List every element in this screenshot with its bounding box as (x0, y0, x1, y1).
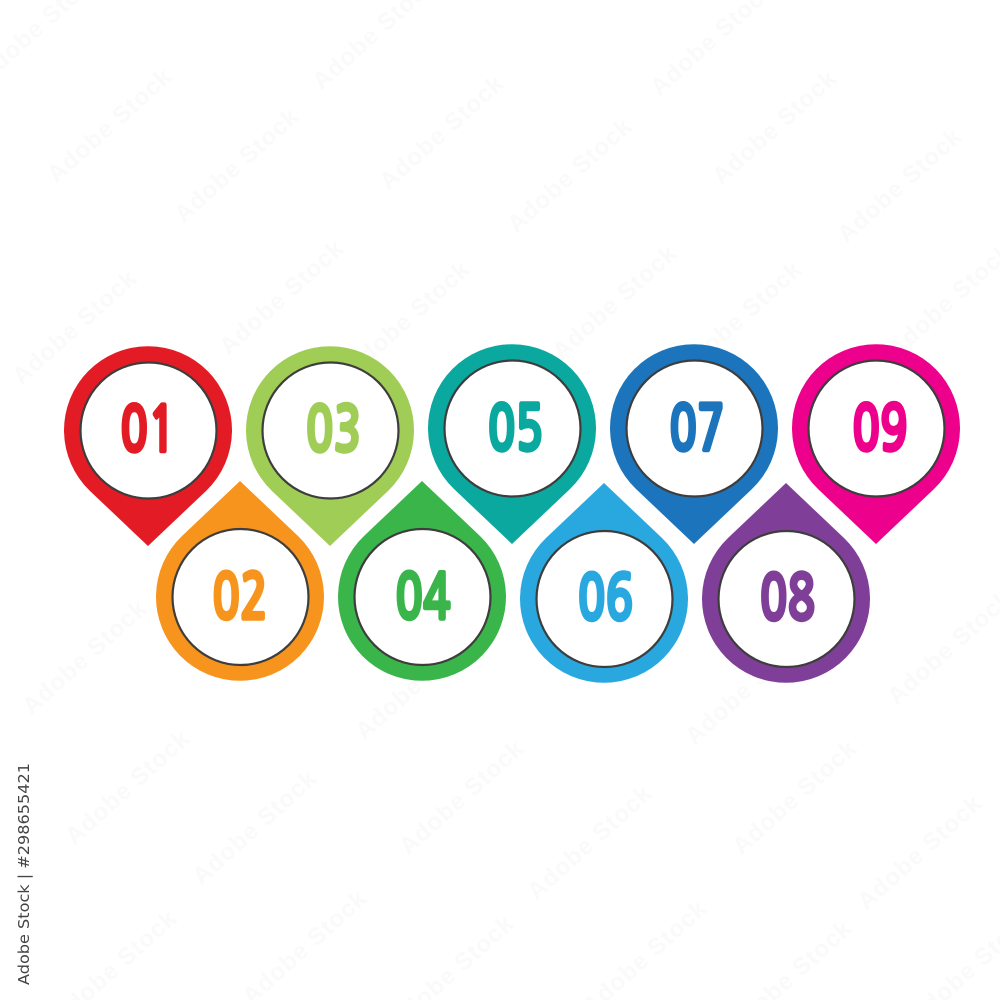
pin 02 (156, 481, 324, 681)
pin 07: 07 (669, 399, 725, 461)
pin 02: 02 (212, 568, 268, 629)
watermark pattern: Adobe Stock (60, 725, 196, 850)
watermark pattern: Adobe Stock (214, 235, 350, 360)
pin 08: 08 (760, 569, 815, 630)
pin 04: 04 (395, 568, 451, 629)
watermark pattern: Adobe Stock (502, 113, 638, 238)
watermark pattern: Adobe Stock (852, 790, 988, 915)
watermark pattern: Adobe Stock (350, 620, 486, 745)
watermark pattern: Adobe Stock (522, 780, 658, 905)
watermark pattern: Adobe Stock (374, 70, 510, 195)
pin 09 (792, 344, 960, 544)
watermark pattern: Adobe Stock (727, 735, 863, 860)
pin 07 (610, 344, 778, 544)
pin 06: 06 (578, 569, 633, 630)
stock id side label: Adobe Stock | #298655421 (15, 763, 33, 985)
watermark pattern: Adobe Stock (7, 265, 143, 390)
watermark pattern: Adobe Stock (547, 240, 683, 365)
pin 08 (702, 483, 870, 683)
watermark pattern: Adobe Stock (17, 595, 153, 720)
pin 01: 01 (120, 400, 176, 462)
watermark pattern: Adobe Stock (42, 63, 178, 188)
pin 03: 03 (306, 400, 361, 462)
watermark pattern: Adobe Stock (394, 735, 530, 860)
pin 06 (520, 483, 688, 683)
pin 03 (246, 346, 414, 546)
pin 05 (428, 344, 596, 544)
watermark pattern: Adobe Stock (169, 103, 305, 228)
watermark pattern: Adobe Stock (340, 256, 476, 381)
pin 01 (64, 346, 232, 546)
pin 09: 09 (852, 399, 908, 461)
watermark pattern: Adobe Stock (707, 65, 843, 190)
watermark pattern: Adobe Stock (187, 765, 323, 890)
watermark pattern: Adobe Stock (680, 625, 816, 750)
pin 04 (338, 481, 506, 681)
watermark pattern: Adobe Stock (832, 123, 968, 248)
watermark pattern: Adobe Stock (672, 256, 808, 381)
pin 05: 05 (488, 399, 543, 461)
